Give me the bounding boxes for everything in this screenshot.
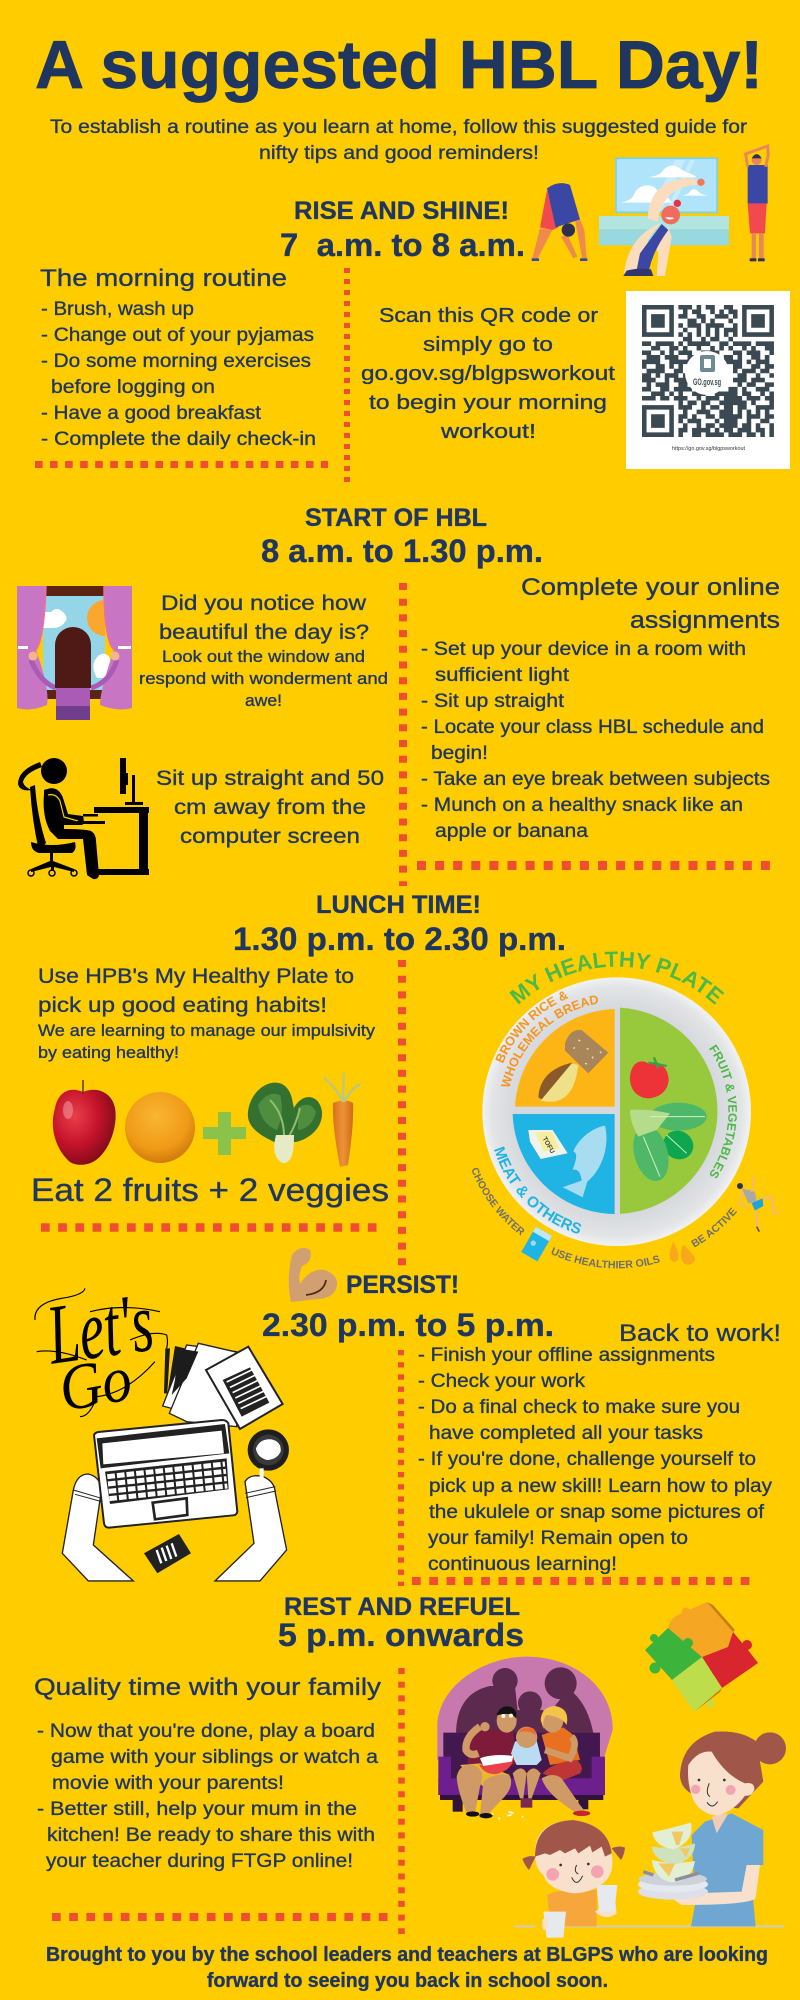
subheading: quality time: Quality time with your family [34, 1674, 381, 1701]
list: family time: - Better still, help your mum in the [37, 1798, 357, 1820]
list: offline work: continuous learning! [428, 1553, 617, 1575]
subheading: complete online assignments: Complete your online [521, 574, 780, 601]
list: family time: kitchen! Be ready to share this with [47, 1824, 375, 1846]
text: sit up straight: cm away from the [174, 796, 366, 819]
woman [541, 1706, 590, 1816]
panel: start of HBL [17, 504, 780, 886]
text: notice the day: respond with wonderment and [139, 670, 388, 688]
text: sit up straight: Sit up straight and 50 [156, 767, 384, 790]
time: 2.30 to 5: 2.30 p.m. to 5 p.m. [262, 1307, 554, 1343]
food: leafy greens [628, 1103, 707, 1185]
list: morning routine: - Have a good breakfast [41, 402, 262, 424]
footer credit [46, 1944, 768, 1992]
left arm [62, 1474, 133, 1581]
subheading: the morning routine: The morning routine [40, 265, 287, 292]
text: healthy plate intro: Use HPB's My Healthy Plate to [38, 965, 354, 988]
list: online assignments: sufficient light [435, 664, 570, 686]
title: A suggested HBL Day! [35, 27, 763, 103]
text: healthy plate intro: by eating healthy! [38, 1044, 179, 1062]
text: notice the day: Look out the window and [162, 648, 365, 666]
icon: water glass [521, 1227, 552, 1261]
icon: active runner [737, 1176, 778, 1232]
caption: eat 2 fruits + 2 veggies: Eat 2 fruits + 2 veggies [31, 1172, 389, 1208]
list: family time: - Now that you're done, play a board [37, 1720, 375, 1742]
callout: scan QR code: workout! [440, 420, 536, 443]
list: online assignments [421, 638, 770, 842]
icon: person at desk [18, 758, 149, 879]
label: choose water: CHOOSE WATER [472, 1168, 524, 1236]
footer credit: Brought to you by the school leaders and teachers at BLGPS who are looking [46, 1944, 768, 1966]
illustration: girl at window [17, 586, 132, 720]
footer credit: forward to seeing you back in school soon. [207, 1970, 608, 1992]
plate section: fruit and vegetables [620, 1008, 717, 1214]
label: brown rice and wholemeal bread: BROWN RICE & [495, 992, 568, 1064]
list: offline work: pick up a new skill! Learn how to play [429, 1475, 772, 1497]
callout: scan QR code [361, 304, 615, 443]
panel: rise and shine [35, 146, 790, 484]
image: orange [125, 1092, 195, 1163]
plate section: meat and others [513, 1114, 615, 1214]
notes tablet [206, 1347, 283, 1429]
list: online assignments: - Take an eye break between subjects [421, 768, 770, 790]
pens [164, 1346, 198, 1397]
right arm [215, 1476, 287, 1581]
paper sheets [163, 1345, 243, 1427]
QR code card [626, 291, 790, 469]
plate section: wholegrains [515, 1009, 615, 1107]
mother [674, 1731, 786, 1926]
chart: my healthy plate [472, 952, 778, 1268]
label: meat and others: MEAT & OTHERS [494, 1146, 582, 1234]
heading: rest and refuel: REST AND REFUEL [284, 1593, 520, 1621]
child [511, 1727, 542, 1808]
list: offline work: - If you're done, challenge yourself to [418, 1448, 756, 1470]
subheading: complete online assignments: assignments [630, 607, 780, 634]
text: notice the day [139, 592, 388, 710]
script: let's go: Go [54, 1342, 137, 1426]
panel: rest and refuel [34, 1593, 786, 1938]
time: 7 to 8 am: 7 a.m. to 8 a.m. [280, 227, 525, 263]
list: family time [37, 1720, 378, 1872]
list: online assignments: begin! [431, 742, 488, 764]
label: fruit and vegetables: FRUIT & VEGETABLES [709, 1044, 737, 1178]
food: tofu and fish: TOFU [541, 1136, 556, 1155]
QR code card: https://go.gov.sg/blgpsworkout [672, 446, 746, 452]
subheading: back to work: Back to work! [619, 1320, 781, 1347]
text: sit up straight: computer screen [180, 825, 360, 848]
list: family time: your teacher during FTGP online! [46, 1850, 353, 1872]
intro text: nifty tips and good reminders! [259, 142, 539, 164]
dishes [638, 1823, 708, 1900]
panel: persist [35, 1248, 781, 1586]
phone [144, 1534, 191, 1573]
list: offline work: - Check your work [418, 1370, 585, 1392]
list: morning routine: - Change out of your pyjamas [41, 324, 314, 346]
text: notice the day: beautiful the day is? [159, 621, 369, 644]
label: brown rice and wholemeal bread: WHOLEMEAL BREAD [500, 996, 598, 1086]
panel: lunch time [31, 891, 778, 1268]
list: offline work: the ukulele or snap some pictures of [429, 1501, 765, 1523]
illustration: family on sofa [437, 1657, 613, 1819]
heading: start of HBL: START OF HBL [305, 504, 487, 532]
list: morning routine [41, 298, 316, 450]
text: healthy plate intro: We are learning to manage our impulsivity [38, 1022, 376, 1040]
heading: rise and shine: RISE AND SHINE! [294, 197, 509, 225]
time: 8 to 1.30: 8 a.m. to 1.30 p.m. [261, 533, 543, 569]
list: online assignments: - Munch on a healthy snack like an [421, 794, 743, 816]
illustration: mother and daughter with dishes [515, 1731, 786, 1938]
list: offline work: have completed all your tasks [429, 1422, 703, 1444]
QR code card: GO.gov.sg [693, 377, 721, 387]
food: bread and rice [538, 1030, 608, 1102]
list: morning routine: - Brush, wash up [41, 298, 194, 320]
list: offline work: your family! Remain open to [428, 1527, 688, 1549]
list: morning routine: before logging on [51, 376, 215, 398]
list: morning routine: - Do some morning exercises [41, 350, 311, 372]
man [457, 1706, 517, 1818]
subheading: complete online assignments [521, 574, 780, 634]
time: 1.30 to 2.30: 1.30 p.m. to 2.30 p.m. [233, 921, 566, 957]
list: online assignments: apple or banana [435, 820, 588, 842]
list: online assignments: - Sit up straight [421, 690, 565, 712]
icon: plus [203, 1112, 246, 1155]
heading: lunch time: LUNCH TIME! [316, 891, 481, 919]
time: 5 pm onwards: 5 p.m. onwards [278, 1617, 524, 1653]
icon: oil drops [670, 1242, 695, 1265]
food: apple [630, 1057, 669, 1098]
list: family time: movie with your parents! [52, 1772, 284, 1794]
image: apple [53, 1080, 116, 1165]
list: offline work [418, 1344, 772, 1575]
callout: scan QR code: simply go to [423, 333, 553, 356]
label: use healthier oils: USE HEALTHIER OILS [552, 1247, 660, 1268]
illustration: laptop desk [35, 1275, 289, 1581]
label: be active: BE ACTIVE [691, 1207, 737, 1248]
callout: scan QR code: Scan this QR code or [379, 304, 598, 327]
label: my healthy plate: MY HEALTHY PLATE [509, 952, 724, 1005]
text: healthy plate intro [38, 965, 376, 1062]
food: tofu and fish [528, 1126, 606, 1197]
coffee cup [248, 1429, 289, 1471]
daughter [522, 1820, 625, 1938]
text: notice the day: awe! [245, 692, 282, 710]
list: family time: game with your siblings or watch a [51, 1746, 378, 1768]
script: let's go: Let's [41, 1275, 159, 1383]
popcorn bowl [479, 1755, 514, 1774]
laptop [94, 1420, 237, 1528]
intro text [50, 116, 748, 164]
list: online assignments: - Set up your device in a room with [421, 638, 746, 660]
illustration: morning exercise [532, 146, 768, 276]
list: online assignments: - Locate your class HBL schedule and [421, 716, 764, 738]
list: offline work: - Do a final check to make sure you [418, 1396, 740, 1418]
list: morning routine: - Complete the daily check-in [41, 428, 316, 450]
list: offline work: - Finish your offline assignments [418, 1344, 715, 1366]
intro text: To establish a routine as you learn at home, follow this suggested guide for [50, 116, 748, 138]
table [515, 1923, 784, 1929]
icon: jigsaw puzzle [645, 1602, 758, 1712]
text: sit up straight [156, 767, 384, 848]
callout: scan QR code: to begin your morning [369, 391, 607, 414]
heading: persist: PERSIST! [346, 1271, 459, 1299]
text: healthy plate intro: pick up good eating habits! [38, 994, 327, 1017]
callout: scan QR code: go.gov.sg/blgpsworkout [361, 362, 615, 385]
image: carrot [324, 1073, 360, 1167]
script: let's go [35, 1275, 167, 1426]
text: notice the day: Did you notice how [161, 592, 367, 615]
icon: flexed arm [289, 1248, 337, 1302]
image: bok choy [248, 1083, 322, 1163]
